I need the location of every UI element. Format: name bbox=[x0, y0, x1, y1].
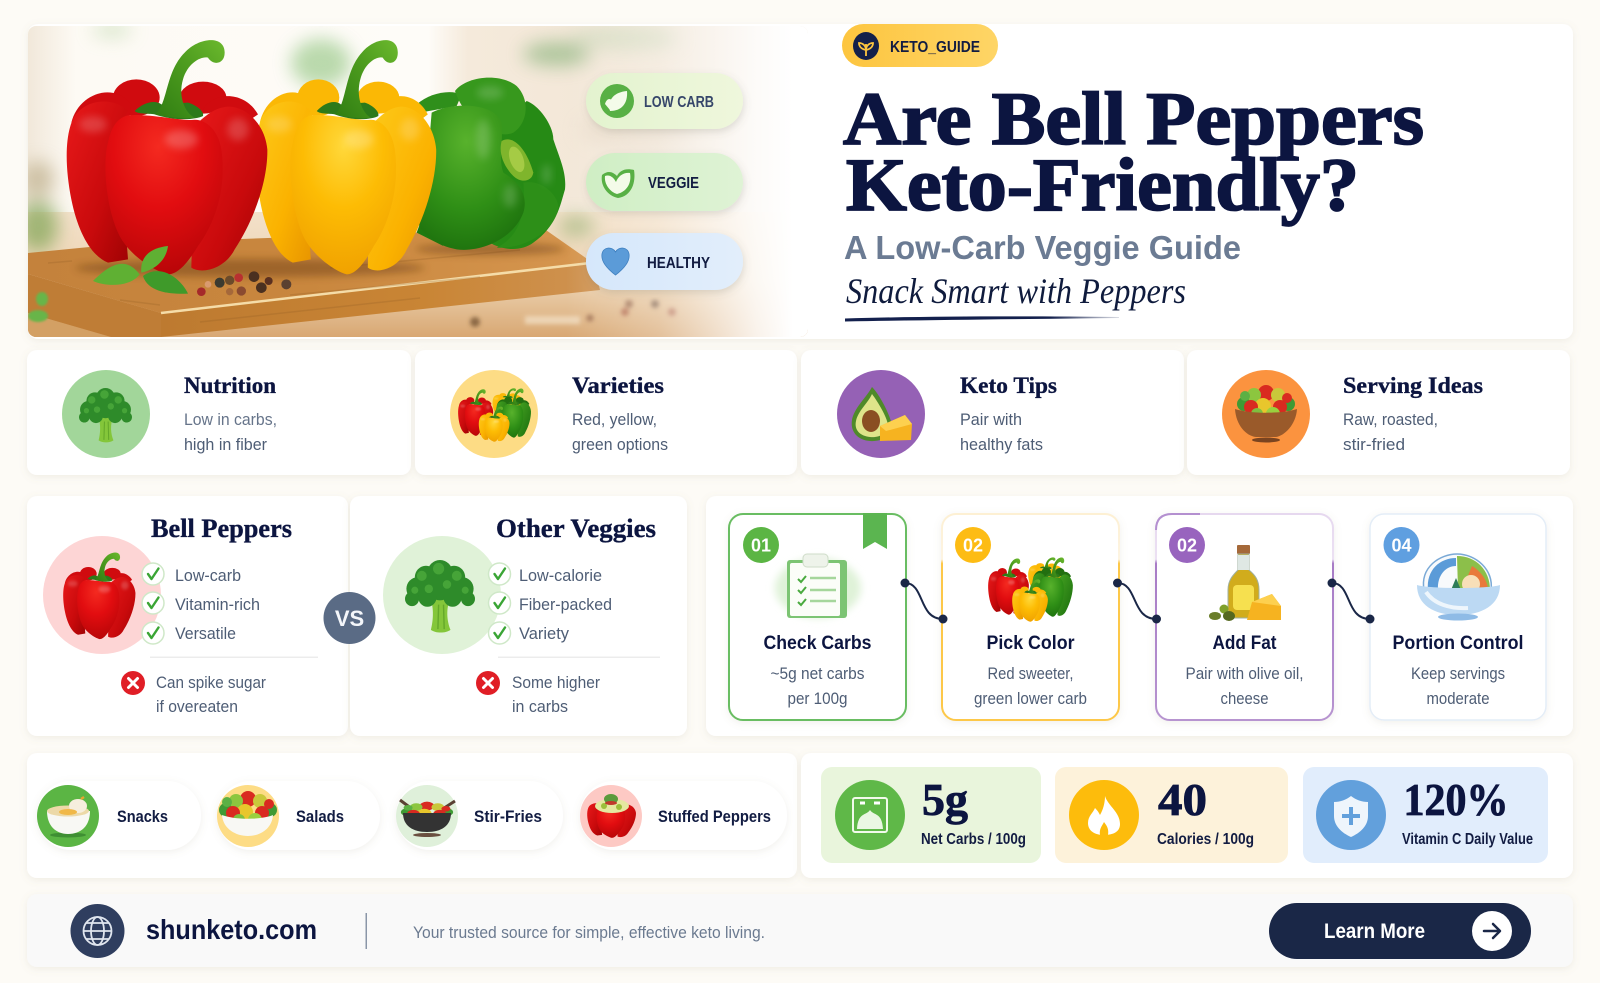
step 2: pick color bbox=[942, 514, 1119, 720]
icon: shield bbox=[1316, 780, 1386, 850]
tag: healthy bbox=[586, 233, 743, 290]
icon: leaf bbox=[600, 84, 634, 118]
step 4: portion control: 04 bbox=[1391, 536, 1412, 556]
step 2: pick color: green lower carb bbox=[974, 689, 1087, 708]
con bbox=[121, 671, 266, 716]
panel: process steps bbox=[706, 496, 1573, 736]
description: green options bbox=[572, 435, 668, 454]
pros list bbox=[142, 563, 260, 644]
panel: stats bbox=[801, 753, 1573, 878]
step 1: check carbs: Check Carbs bbox=[764, 633, 872, 654]
footer: shunketo.com bbox=[146, 914, 317, 945]
con: if overeaten bbox=[156, 697, 238, 716]
step 4: portion control: moderate bbox=[1426, 689, 1490, 708]
card: serving ideas bbox=[1187, 350, 1570, 475]
step 3: add fat: 02 bbox=[1177, 536, 1197, 556]
description bbox=[960, 410, 1043, 454]
step 2: pick color: Red sweeter, bbox=[988, 664, 1074, 683]
button: learn more bbox=[1269, 903, 1531, 959]
step 1: check carbs: ~5g net carbs bbox=[770, 664, 864, 683]
heading: Bell Peppers bbox=[151, 514, 292, 543]
yellow pepper bbox=[256, 40, 436, 274]
arrow: step 1 to 2 bbox=[900, 578, 948, 624]
tag: veggie bbox=[586, 153, 743, 211]
description: Red, yellow, bbox=[572, 410, 657, 429]
panel: hero bbox=[18, 22, 1573, 340]
button: learn more: Learn More bbox=[1324, 920, 1425, 943]
arrow: step 3 to 4 bbox=[1328, 578, 1374, 624]
card: varieties bbox=[415, 350, 797, 475]
icon: leaf heart bbox=[602, 169, 634, 198]
icon: badge emblem bbox=[853, 32, 879, 60]
icon: olive oil and cheese bbox=[1209, 545, 1281, 621]
pill: snacks: Snacks bbox=[117, 807, 168, 826]
step 3: add fat: Add Fat bbox=[1212, 633, 1277, 654]
icon: carbs chart bbox=[835, 780, 905, 850]
stat: vitamin c: 120% bbox=[1404, 775, 1508, 825]
badge: keto guide bbox=[842, 24, 998, 67]
icon: arrow bbox=[1472, 911, 1512, 951]
step 4: portion control bbox=[1370, 514, 1546, 720]
icon: salad bowl bbox=[1222, 370, 1310, 458]
icon: red pepper bbox=[43, 536, 161, 654]
tagline underline bbox=[845, 316, 1119, 322]
con: Some higher bbox=[512, 673, 600, 692]
basil leaves bbox=[93, 246, 188, 294]
cutting board bbox=[28, 228, 676, 338]
step 1: check carbs: per 100g bbox=[788, 689, 848, 708]
step 4: portion control: Keep servings bbox=[1411, 664, 1505, 683]
pill: salads bbox=[217, 781, 380, 850]
pill: stuffed peppers: Stuffed Peppers bbox=[658, 807, 771, 826]
card: nutrition: Nutrition bbox=[184, 373, 276, 398]
title: Are Bell Peppers bbox=[843, 78, 1424, 161]
panel: other veggies comparison bbox=[350, 496, 687, 736]
vs badge bbox=[324, 592, 376, 644]
con: in carbs bbox=[512, 697, 568, 716]
title bbox=[843, 78, 1424, 227]
description bbox=[184, 410, 277, 454]
step 3: add fat: Pair with olive oil, bbox=[1186, 664, 1304, 683]
step 1: check carbs: 01 bbox=[751, 536, 771, 556]
icon: broccoli bbox=[62, 370, 150, 458]
panel: serving pills bbox=[27, 753, 797, 878]
pill: stuffed peppers bbox=[580, 781, 787, 850]
pros list: Low-calorie bbox=[519, 566, 602, 585]
description bbox=[1343, 410, 1438, 454]
description: Raw, roasted, bbox=[1343, 410, 1438, 429]
stat: calories bbox=[1055, 767, 1288, 863]
pros list: Variety bbox=[519, 624, 569, 643]
con bbox=[476, 671, 600, 716]
panel: bell peppers comparison bbox=[27, 496, 348, 736]
icon: heart bbox=[602, 248, 629, 275]
vs badge: VS bbox=[335, 606, 364, 631]
pill: stir-fries: Stir-Fries bbox=[474, 807, 542, 826]
pros list: Low-carb bbox=[175, 566, 241, 585]
stat: net carbs: Net Carbs / 100g bbox=[921, 831, 1026, 848]
icon: gauge bowl bbox=[1417, 554, 1500, 620]
step 3: add fat: cheese bbox=[1220, 689, 1268, 708]
script tagline: Snack Smart with Peppers bbox=[846, 271, 1186, 311]
icon: mixed peppers bbox=[450, 370, 538, 458]
footer bbox=[27, 894, 1573, 967]
left foreground leaves bbox=[28, 292, 48, 322]
stat: net carbs bbox=[821, 767, 1041, 863]
stat: calories: 40 bbox=[1158, 775, 1207, 825]
step 1: check carbs bbox=[729, 513, 906, 720]
icon: globe bbox=[70, 904, 124, 958]
stat: vitamin c: Vitamin C Daily Value bbox=[1402, 831, 1533, 848]
tag: veggie: VEGGIE bbox=[648, 175, 699, 192]
pros list: Vitamin-rich bbox=[175, 595, 260, 614]
icon: mixed peppers bbox=[988, 557, 1073, 622]
pros list bbox=[488, 563, 612, 644]
pros list: Versatile bbox=[175, 624, 236, 643]
hero photo: bell peppers on cutting board bbox=[18, 22, 830, 340]
stat: net carbs: 5g bbox=[922, 775, 969, 825]
step 4: portion control: Portion Control bbox=[1392, 633, 1524, 654]
shadows under peppers bbox=[75, 243, 565, 277]
heading: Other Veggies bbox=[496, 514, 656, 543]
tag: healthy: HEALTHY bbox=[647, 255, 710, 272]
card: keto tips: Keto Tips bbox=[960, 373, 1057, 398]
pill: salads: Salads bbox=[296, 807, 344, 826]
icon: avocado and cheese bbox=[837, 370, 925, 458]
tag: low carb: LOW CARB bbox=[644, 94, 714, 111]
con: Can spike sugar bbox=[156, 673, 266, 692]
step 3: add fat bbox=[1156, 514, 1333, 720]
subtitle: A Low-Carb Veggie Guide bbox=[844, 229, 1241, 266]
icon: flame bbox=[1069, 780, 1139, 850]
card: nutrition bbox=[27, 350, 411, 475]
description: Pair with bbox=[960, 410, 1022, 429]
description: healthy fats bbox=[960, 435, 1043, 454]
footer: Your trusted source for simple, effective keto living. bbox=[413, 923, 765, 942]
peppercorns bbox=[197, 271, 291, 296]
card: serving ideas: Serving Ideas bbox=[1343, 373, 1483, 398]
card: varieties: Varieties bbox=[572, 373, 664, 398]
pill: snacks bbox=[37, 781, 201, 850]
description: stir-fried bbox=[1343, 435, 1405, 454]
title: Keto-Friendly? bbox=[846, 144, 1359, 227]
description bbox=[572, 410, 668, 454]
icon: broccoli bbox=[383, 536, 501, 654]
step 2: pick color: Pick Color bbox=[986, 633, 1075, 654]
description: high in fiber bbox=[184, 435, 267, 454]
pros list: Fiber-packed bbox=[519, 595, 612, 614]
pill: stir-fries bbox=[396, 781, 563, 850]
stat: vitamin c bbox=[1303, 767, 1548, 863]
description: Low in carbs, bbox=[184, 410, 277, 429]
stat: calories: Calories / 100g bbox=[1157, 831, 1254, 848]
icon: clipboard bbox=[775, 554, 861, 618]
tag: low carb bbox=[586, 73, 743, 129]
arrow: step 2 to 3 bbox=[1113, 578, 1161, 624]
step 2: pick color: 02 bbox=[963, 536, 983, 556]
badge: keto guide: KETO_GUIDE bbox=[890, 39, 980, 56]
green pepper bbox=[417, 78, 565, 250]
card: keto tips bbox=[801, 350, 1184, 475]
bookmark bbox=[863, 513, 887, 549]
red pepper bbox=[67, 40, 267, 274]
